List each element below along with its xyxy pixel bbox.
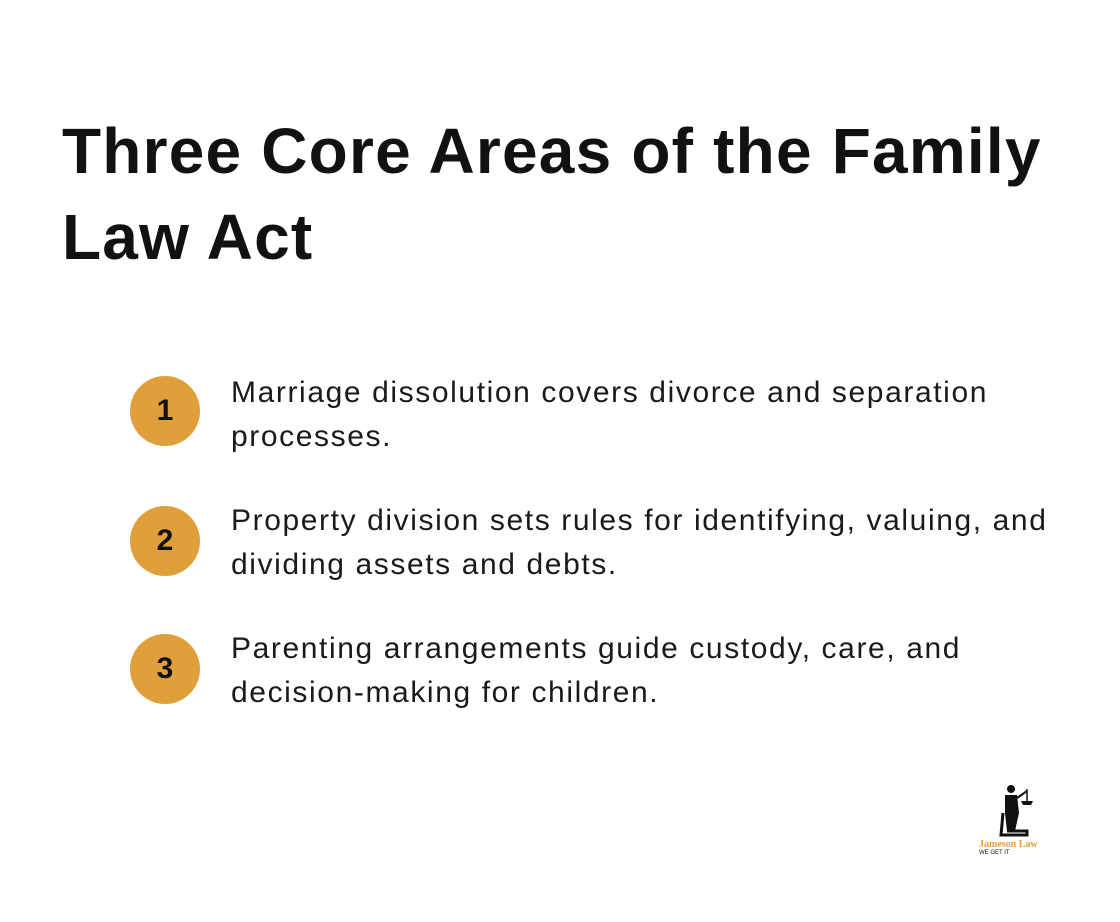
text 2: dividing assets and debts. bbox=[231, 548, 618, 581]
title bbox=[62, 115, 1042, 273]
text 3 bbox=[231, 632, 961, 709]
item 3 bbox=[130, 632, 961, 709]
text 3: Parenting arrangements guide custody, care, and bbox=[231, 632, 961, 665]
text 1 bbox=[231, 376, 988, 453]
icon: lady justice bbox=[999, 785, 1033, 836]
title: Three Core Areas of the Family bbox=[62, 115, 1042, 187]
text 2 bbox=[231, 504, 1048, 581]
text 2: Property division sets rules for identifying, valuing, and bbox=[231, 504, 1048, 537]
brand text: Jameson Law bbox=[979, 839, 1038, 850]
badge 2: 2 bbox=[157, 524, 173, 557]
item 1 bbox=[130, 376, 988, 453]
badge 1 bbox=[130, 376, 200, 446]
badge 2 bbox=[130, 506, 200, 576]
badge 3 bbox=[130, 634, 200, 704]
text 1: processes. bbox=[231, 420, 392, 453]
text 3: decision-making for children. bbox=[231, 676, 659, 709]
title: Law Act bbox=[62, 201, 313, 273]
badge 1: 1 bbox=[157, 394, 173, 427]
logo bbox=[979, 785, 1038, 856]
item 2 bbox=[130, 504, 1048, 581]
badge 3: 3 bbox=[157, 652, 173, 685]
text 1: Marriage dissolution covers divorce and separation bbox=[231, 376, 988, 409]
logo: WE GET IT bbox=[979, 850, 1010, 856]
